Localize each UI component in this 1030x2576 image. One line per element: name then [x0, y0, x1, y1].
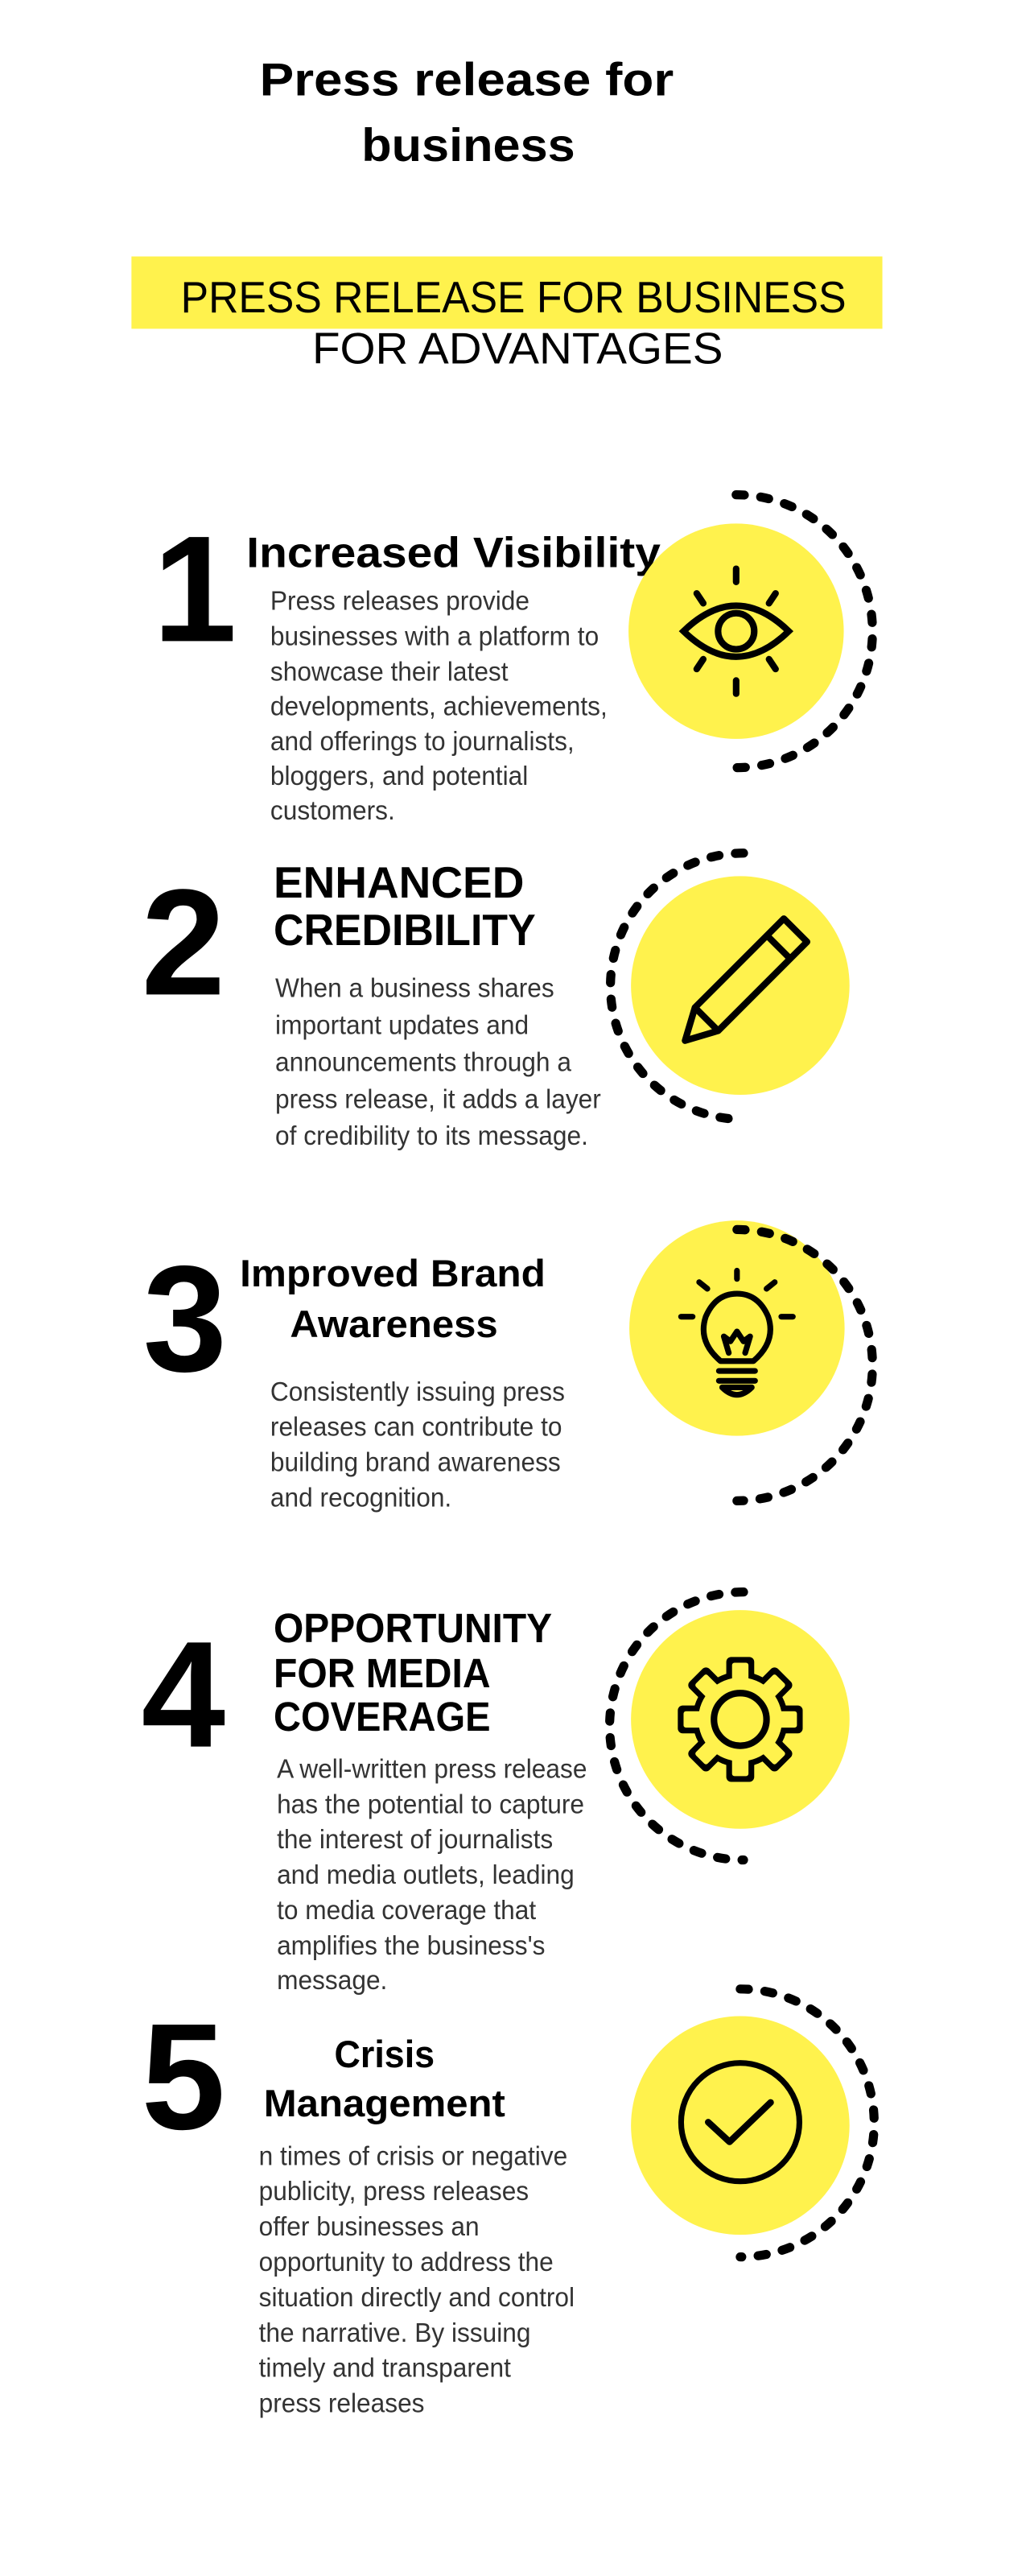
body 3: building brand awareness [270, 1447, 561, 1477]
body 5: n times of crisis or negative [259, 2140, 567, 2171]
heading 3: Awareness [290, 1302, 498, 1345]
title: Press release for [260, 54, 674, 105]
icon: light bulb [629, 1220, 872, 1501]
body 4: message. [277, 1964, 387, 1995]
number 3: 3 [143, 1234, 227, 1403]
heading 2 [274, 857, 536, 955]
body 1 [270, 585, 608, 825]
body 5: offer businesses an [259, 2211, 480, 2241]
body 1: showcase their latest [270, 655, 509, 687]
body 2: announcements through a [275, 1046, 572, 1077]
body 3: and recognition. [270, 1482, 451, 1513]
section 4: opportunity for media coverage [142, 1592, 850, 1995]
section 2: enhanced credibility [142, 853, 850, 1150]
banner: PRESS RELEASE FOR BUSINESS [181, 272, 847, 322]
number 1: 1 [153, 504, 237, 673]
heading 4: FOR MEDIA [274, 1650, 491, 1696]
body 4: A well-written press release [277, 1753, 587, 1784]
body 2: important updates and [275, 1009, 529, 1040]
icon: pencil [611, 853, 850, 1120]
body 4: the interest of journalists [277, 1823, 553, 1854]
icon: check circle [631, 1989, 874, 2257]
heading 2: CREDIBILITY [274, 905, 536, 955]
heading 4: COVERAGE [274, 1694, 491, 1740]
title [260, 54, 674, 171]
heading 4: OPPORTUNITY [274, 1605, 552, 1651]
body 1: and offerings to journalists, [270, 725, 575, 756]
title: business [361, 120, 575, 171]
heading 5: Crisis [335, 2033, 435, 2075]
number 4: 4 [142, 1610, 225, 1779]
banner: FOR ADVANTAGES [312, 323, 723, 373]
body 5: opportunity to address the [259, 2246, 554, 2277]
body 5: press releases [259, 2388, 425, 2418]
section 5: crisis management [142, 1989, 874, 2418]
icon: gear [610, 1592, 850, 1860]
body 2: press release, it adds a layer [275, 1083, 601, 1114]
heading 1: Increased Visibility [246, 529, 661, 576]
section 1: increased visibility [153, 495, 872, 825]
heading 2: ENHANCED [274, 857, 524, 907]
body 3: Consistently issuing press [270, 1376, 565, 1406]
body 2: of credibility to its message. [275, 1120, 588, 1150]
body 5: situation directly and control [259, 2281, 575, 2312]
number 5: 5 [142, 1992, 225, 2161]
heading 3: Improved Brand [240, 1252, 546, 1294]
body 4: and media outlets, leading [277, 1859, 575, 1889]
body 4 [277, 1753, 587, 1995]
body 5 [259, 2140, 575, 2418]
body 2: When a business shares [275, 972, 554, 1003]
banner [131, 257, 883, 373]
heading 5 [264, 2033, 505, 2124]
body 1: bloggers, and potential [270, 760, 528, 791]
body 1: Press releases provide [270, 585, 529, 616]
body 1: businesses with a platform to [270, 621, 599, 651]
body 2 [275, 972, 601, 1150]
body 3: releases can contribute to [270, 1411, 562, 1442]
body 4: to media coverage that [277, 1894, 536, 1925]
body 4: amplifies the business's [277, 1930, 545, 1960]
body 5: timely and transparent [259, 2352, 511, 2383]
number 2: 2 [142, 857, 225, 1026]
heading 3 [240, 1252, 546, 1345]
body 3 [270, 1376, 565, 1513]
body 1: customers. [270, 795, 395, 825]
heading 5: Management [264, 2082, 505, 2124]
body 5: the narrative. By issuing [259, 2317, 531, 2347]
body 1: developments, achievements, [270, 690, 608, 720]
body 5: publicity, press releases [259, 2175, 529, 2206]
heading 4 [274, 1605, 552, 1740]
icon: eye [628, 495, 872, 768]
body 4: has the potential to capture [277, 1788, 584, 1819]
section 3: improved brand awareness [143, 1220, 872, 1513]
